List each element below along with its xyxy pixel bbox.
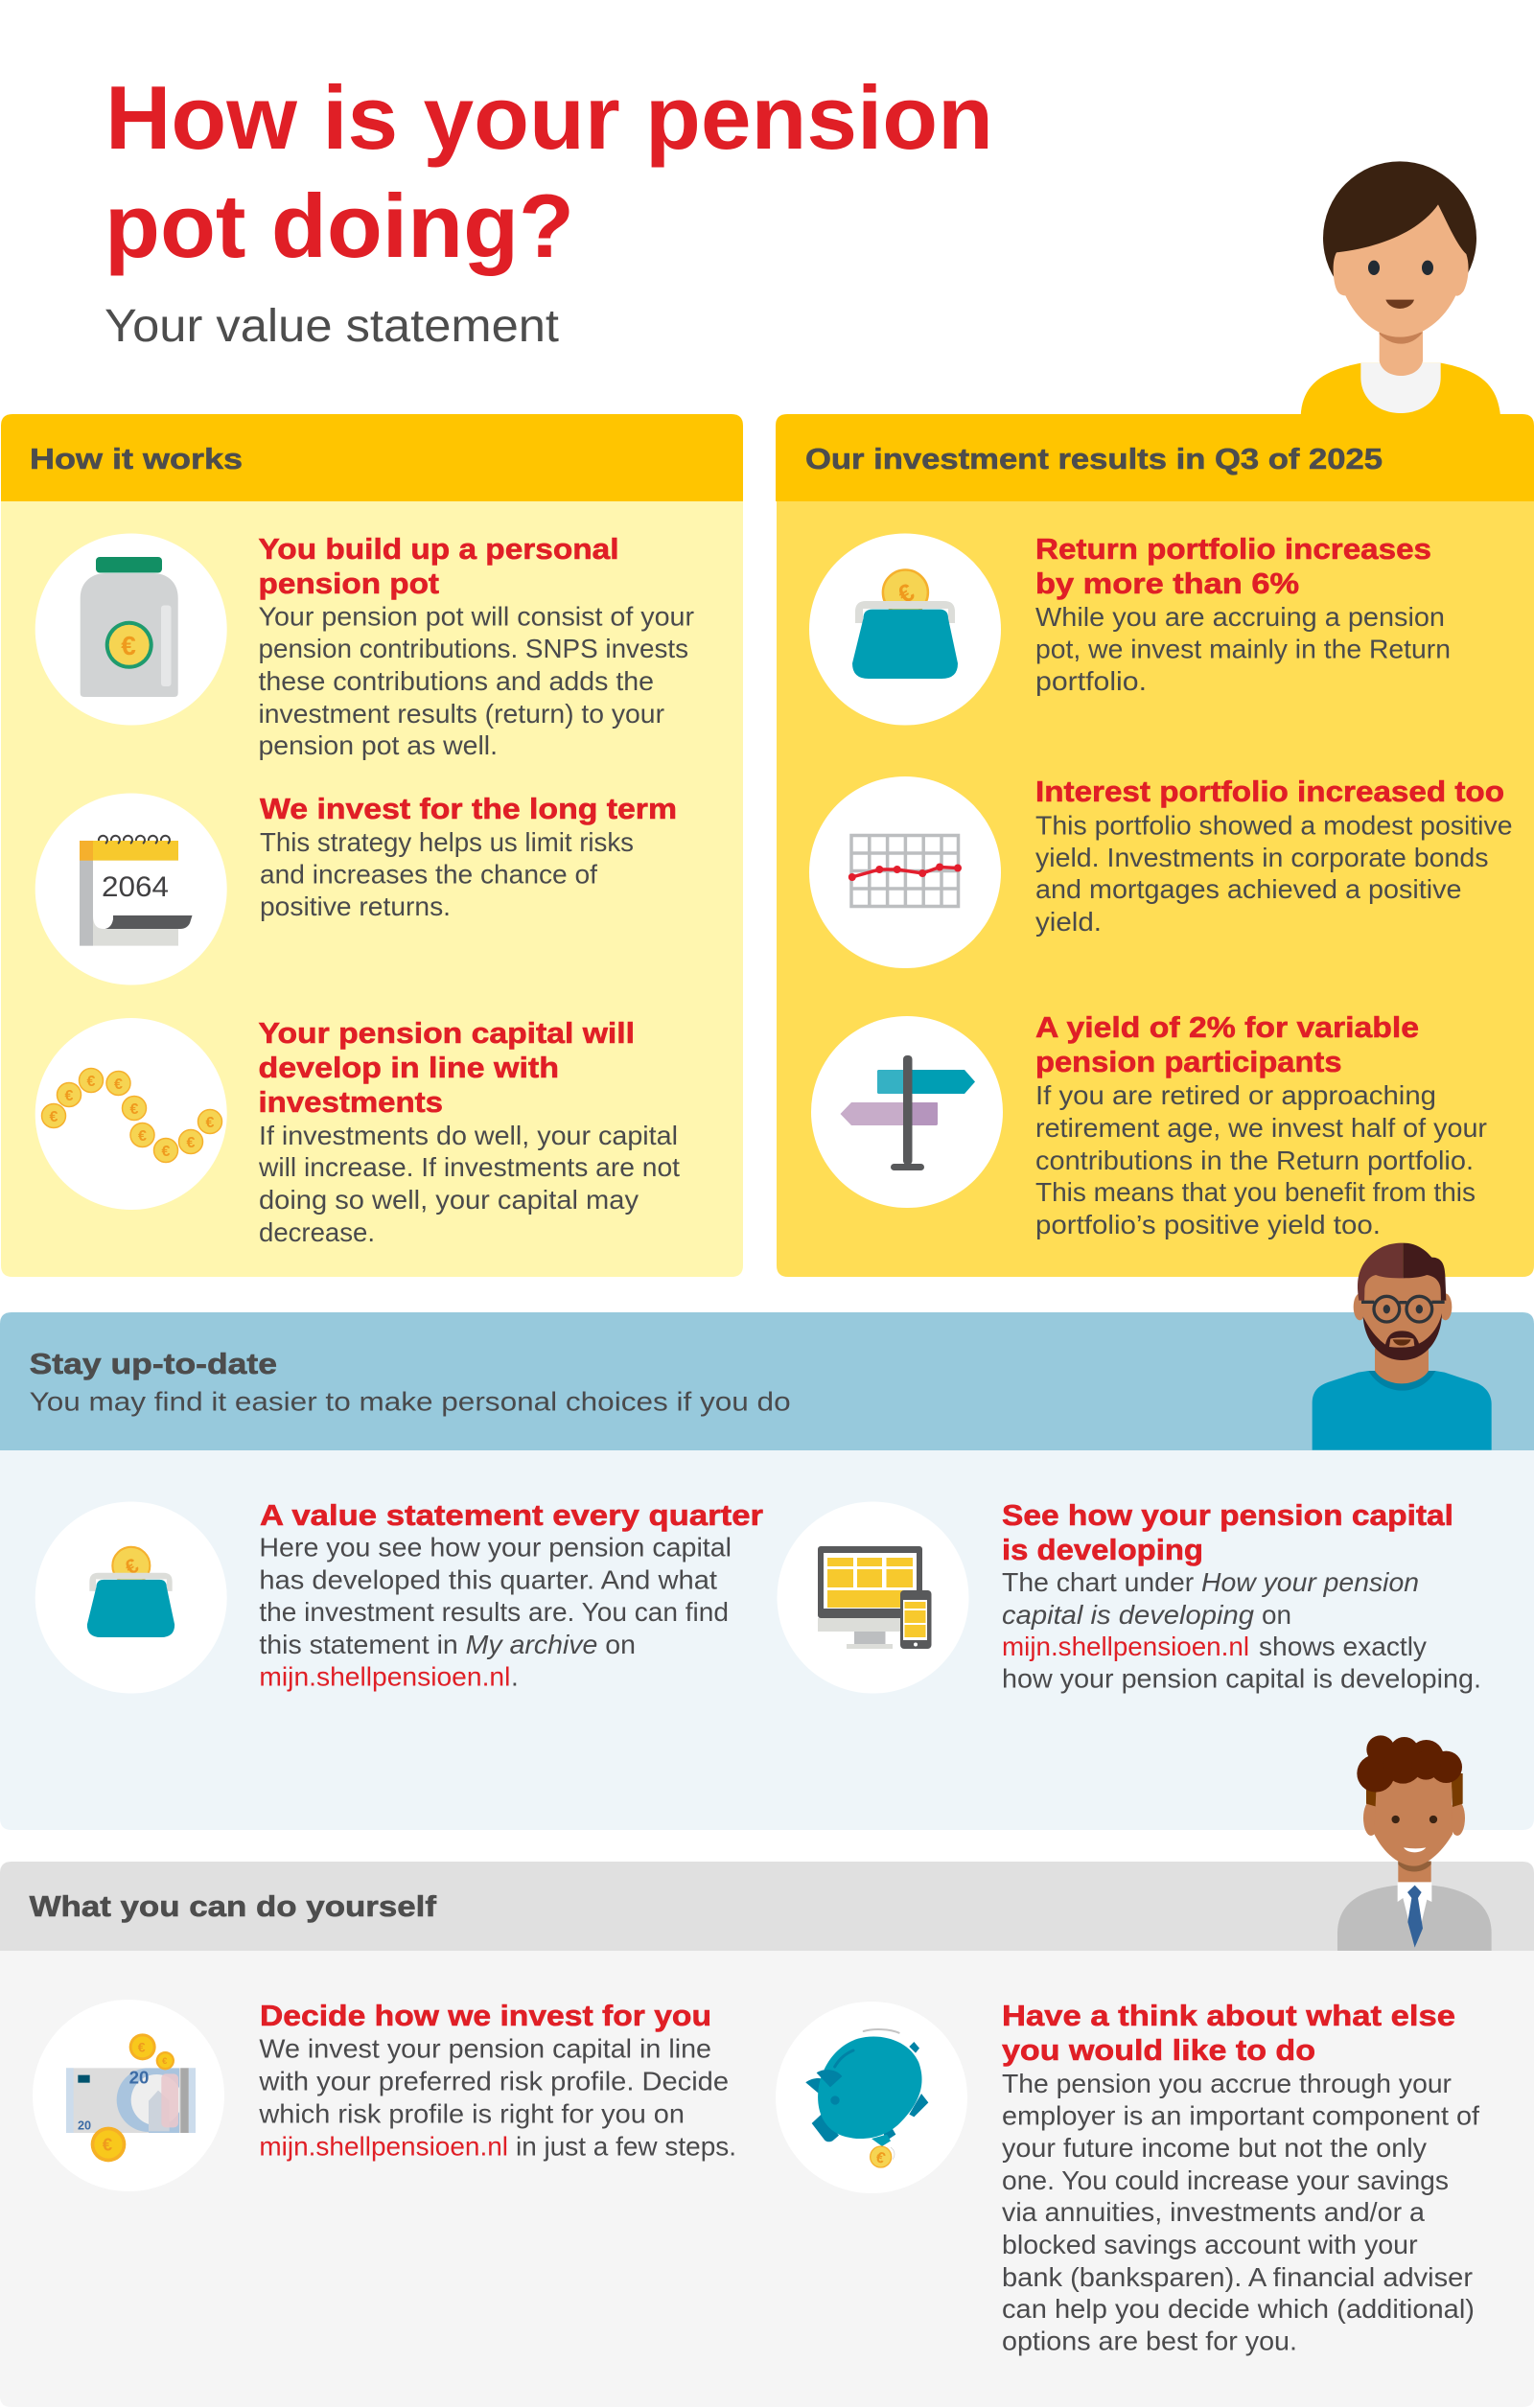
text: build up a pension pot	[259, 532, 694, 760]
text: return portfolio: by more than 6%	[1035, 567, 1299, 600]
icon: jar: €	[121, 631, 136, 660]
text: yield of 2%: pension participants	[1035, 1045, 1342, 1078]
text: yield of 2%: portfolio’s positive yield too.	[1035, 1210, 1381, 1239]
text: decide how we invest: which risk profile is right for you on	[258, 2099, 685, 2128]
icon: banknote and coins: €	[138, 2039, 146, 2054]
text: think about what else: Have a think about what else	[1002, 1999, 1455, 2032]
icon: coin wave: €	[87, 1074, 96, 1090]
heading: stay up-to-date: Stay up-to-date	[30, 1347, 277, 1380]
icon: banknote and coins	[33, 2000, 224, 2191]
icon: line chart	[809, 776, 1001, 968]
text: return portfolio: Return portfolio increases	[1035, 532, 1431, 566]
text: think about what else: via annuities, investments and/or a	[1002, 2197, 1425, 2227]
text: pension capital develops: will increase. If investments are not	[258, 1152, 680, 1182]
icon: coin wave: €	[138, 1128, 147, 1145]
icon: piggy bank	[776, 2002, 967, 2193]
person: man with suit	[1337, 1735, 1492, 1951]
text: yield of 2%: This means that you benefit from this	[1035, 1177, 1476, 1207]
text: return portfolio: portfolio.	[1035, 666, 1147, 696]
text: build up a pension pot: You build up a personal	[259, 532, 619, 566]
text: build up a pension pot: pension pot	[259, 567, 439, 600]
icon: coin wave: €	[65, 1088, 74, 1104]
text: see how your pension capital is developing: is developing	[1002, 1533, 1203, 1566]
text: think about what else: one. You could increase your savings	[1002, 2165, 1449, 2195]
icon: coin wave: €	[187, 1135, 196, 1151]
icon: piggy bank: €	[873, 2149, 887, 2167]
text: invest for the long term	[260, 792, 677, 921]
text: interest portfolio: This portfolio showed a modest positive	[1035, 811, 1513, 840]
text: think about what else: you would like to do	[1002, 2033, 1315, 2067]
icon: coin wave	[35, 1018, 227, 1210]
heading: how it works: How it works	[30, 442, 243, 475]
text: return portfolio	[1035, 532, 1451, 696]
text: build up a pension pot: pension contributions. SNPS invests	[259, 634, 688, 663]
title: pot doing?	[105, 175, 574, 276]
text: build up a pension pot: Your pension pot will consist of your	[259, 602, 694, 631]
icon: calendar: 2064	[102, 871, 169, 903]
icon: coin wave: €	[162, 1144, 171, 1160]
panel: what you can do yourself	[0, 1862, 1534, 2407]
heading: investment results: Our investment results in Q3 of 2025	[805, 442, 1383, 475]
text: think about what else: options are best for you.	[1002, 2327, 1297, 2356]
text: think about what else: The pension you accrue through your	[1002, 2069, 1452, 2098]
text: pension capital develops: investments	[259, 1085, 443, 1119]
heading: what you can do yourself: What you can do yourself	[30, 1889, 437, 1923]
heading: stay up-to-date: You may find it easier to make personal choices if you do	[30, 1387, 791, 1417]
icon: purse: €	[893, 577, 919, 609]
text: see how your pension capital is developing: shows exactly	[1259, 1632, 1427, 1661]
text: build up a pension pot: these contributions and adds the	[259, 666, 654, 696]
text: yield of 2%: contributions in the Return portfolio.	[1035, 1146, 1474, 1175]
text: think about what else: employer is an important component of	[1002, 2101, 1479, 2130]
title	[105, 67, 993, 276]
text: yield of 2%	[1035, 1010, 1487, 1239]
text: see how your pension capital is developing: how your pension capital is developing.	[1002, 1664, 1481, 1693]
icon: purse	[809, 533, 1001, 725]
text: value statement every quarter: has developed this quarter. And what	[259, 1564, 717, 1595]
text: invest for the long term: This strategy helps us limit risks	[260, 827, 634, 857]
icon: desktop and phone	[777, 1501, 968, 1693]
text: see how your pension capital is developing: on	[1262, 1600, 1291, 1630]
text: decide how we invest: mijn.shellpensioen.nl	[259, 2132, 508, 2161]
text: invest for the long term: positive returns.	[260, 891, 451, 921]
text: value statement every quarter: mijn.shellpensioen.nl	[259, 1662, 510, 1691]
heading: stay up-to-date	[30, 1347, 791, 1417]
text: pension capital develops: decrease.	[259, 1217, 375, 1247]
text: think about what else: bank (banksparen). A financial adviser	[1002, 2262, 1473, 2292]
icon: purse small: €	[121, 1553, 143, 1580]
panel: investment results	[776, 414, 1534, 1277]
icon: banknote and coins: 20	[129, 2067, 149, 2087]
text: decide how we invest	[258, 1999, 736, 2161]
text: value statement every quarter: .	[511, 1662, 519, 1691]
icon: coin wave: €	[206, 1115, 215, 1131]
text: see how your pension capital is developing	[1002, 1498, 1481, 1693]
subtitle: Your value statement	[105, 301, 559, 352]
icon: coin wave: €	[50, 1109, 58, 1125]
text: pension capital develops: Your pension capital will	[259, 1016, 635, 1050]
icon: banknote and coins: 20	[78, 2119, 91, 2132]
icon: purse small	[35, 1501, 227, 1693]
icon: calendar	[35, 794, 227, 985]
text: interest portfolio	[1035, 775, 1513, 937]
panel: stay up-to-date	[0, 1312, 1534, 1830]
text: value statement every quarter: this statement in My archive on	[259, 1630, 636, 1659]
text: decide how we invest: in just a few steps.	[516, 2132, 736, 2161]
text: interest portfolio: yield. Investments in corporate bonds	[1035, 843, 1488, 872]
text: think about what else: can help you decide which (additional)	[1002, 2294, 1475, 2324]
text: see how your pension capital is developing: mijn.shellpensioen.nl	[1002, 1632, 1249, 1661]
text: value statement every quarter	[259, 1498, 763, 1691]
text: value statement every quarter: the investment results are. You can find	[259, 1597, 729, 1627]
icon: coin wave: €	[130, 1101, 139, 1118]
icon: jar	[35, 533, 227, 725]
text: see how your pension capital is developing: See how your pension capital	[1002, 1498, 1453, 1532]
icon: banknote and coins: €	[162, 2056, 168, 2066]
person: man with beard and glasses	[1313, 1243, 1492, 1450]
text: interest portfolio: Interest portfolio increased too	[1035, 775, 1504, 808]
text: pension capital develops: develop in line with	[259, 1051, 559, 1084]
text: see how your pension capital is developing: The chart under How your pension	[1002, 1567, 1419, 1597]
text: yield of 2%: A yield of 2% for variable	[1035, 1010, 1419, 1044]
text: think about what else: blocked savings account with your	[1002, 2230, 1418, 2259]
text: yield of 2%: If you are retired or approaching	[1035, 1080, 1436, 1110]
icon: signpost	[811, 1016, 1003, 1208]
text: decide how we invest: with your preferred risk profile. Decide	[258, 2067, 729, 2095]
text: invest for the long term: and increases the chance of	[260, 859, 597, 890]
text: return portfolio: pot, we invest mainly in the Return	[1035, 635, 1451, 663]
person: woman	[1301, 161, 1500, 415]
text: pension capital develops	[258, 1016, 680, 1247]
icon: banknote and coins: €	[103, 2134, 113, 2154]
text: value statement every quarter: A value statement every quarter	[260, 1498, 763, 1532]
text: think about what else: your future income but not the only	[1002, 2133, 1427, 2163]
text: value statement every quarter: Here you see how your pension capital	[259, 1532, 732, 1563]
text: interest portfolio: and mortgages achieved a positive	[1035, 874, 1461, 904]
text: see how your pension capital is developing: capital is developing	[1002, 1600, 1254, 1630]
text: decide how we invest: We invest your pension capital in line	[259, 2034, 711, 2063]
text: invest for the long term: We invest for the long term	[260, 792, 677, 825]
icon: coin wave: €	[114, 1077, 123, 1093]
text: return portfolio: While you are accruing a pension	[1035, 602, 1445, 632]
text: pension capital develops: doing so well, your capital may	[259, 1185, 639, 1215]
text: interest portfolio: yield.	[1035, 907, 1102, 937]
text: yield of 2%: retirement age, we invest half of your	[1035, 1113, 1487, 1143]
title: How is your pension	[105, 67, 993, 168]
text: think about what else	[1002, 1999, 1479, 2356]
text: decide how we invest: Decide how we invest for you	[260, 1999, 711, 2032]
text: build up a pension pot: pension pot as well.	[259, 730, 498, 760]
text: pension capital develops: If investments do well, your capital	[259, 1121, 678, 1150]
panel: how it works	[1, 414, 743, 1277]
text: build up a pension pot: investment results (return) to your	[259, 699, 664, 729]
